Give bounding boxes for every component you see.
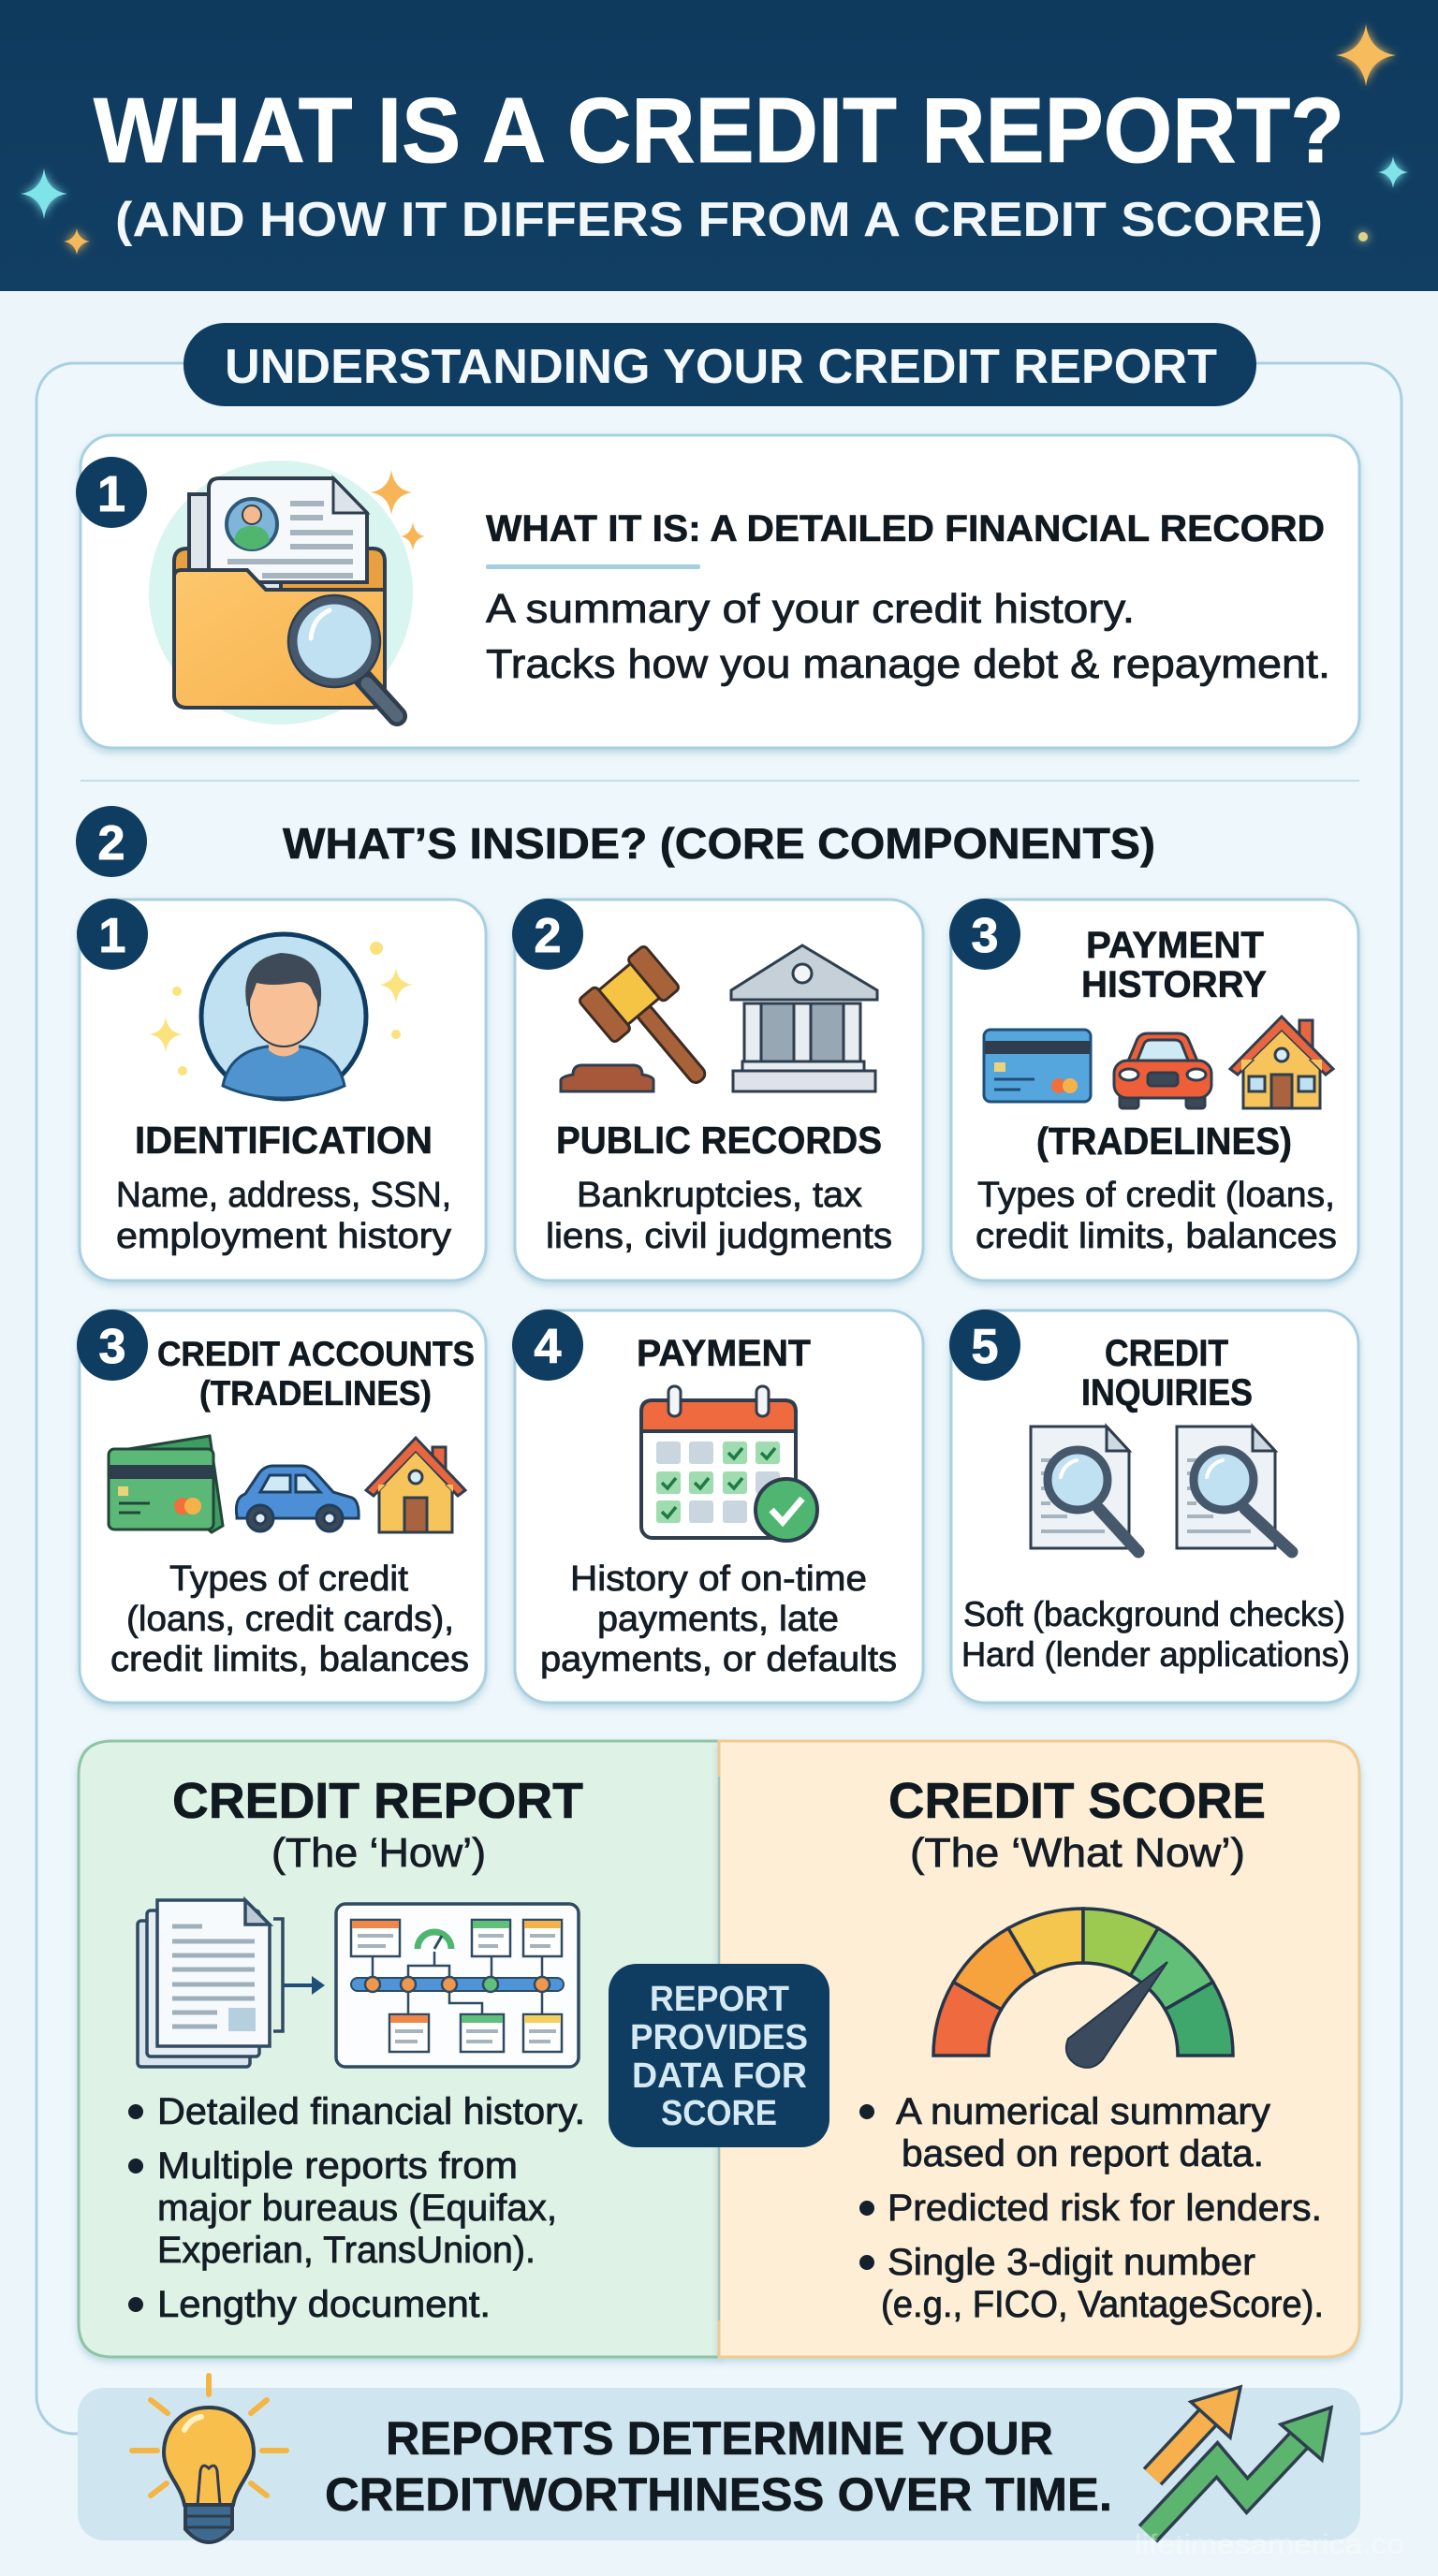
icon: sparkle stars: [21, 24, 1408, 255]
heading: what it is: WHAT IT IS: A DETAILED FINANCIAL RECORD: [486, 508, 1325, 549]
badge 5: [949, 1310, 1020, 1381]
bullet list: credit report: major bureaus (Equifax,: [157, 2188, 557, 2229]
badge 3: [77, 1310, 148, 1381]
icon: blue card: [984, 1030, 1091, 1102]
text: takeaway: [325, 2412, 1112, 2521]
callout: report provides data for score: [609, 1964, 829, 2147]
section heading: what's inside: WHAT’S INSIDE? (CORE COMPONENTS): [283, 819, 1155, 868]
card: identification: employment history: [116, 1217, 451, 1256]
icon: green cards: [109, 1436, 223, 1532]
bullet list: credit score: (e.g., FICO, VantageScore).: [881, 2284, 1324, 2325]
card: public records: Bankruptcies, tax: [577, 1176, 862, 1215]
card: credit inquiries: INQUIRIES: [1081, 1372, 1253, 1413]
panel: credit report vs credit score comparison: [79, 1741, 1359, 2357]
icon: document with magnifier: [1177, 1427, 1292, 1552]
right side: credit score: [719, 1741, 1359, 2357]
bullet list: credit report: Detailed financial history.: [157, 2091, 585, 2132]
card: identification: IDENTIFICATION: [135, 1119, 433, 1162]
card: payment: [512, 1310, 923, 1703]
card: payment history: Types of credit (loans,: [977, 1176, 1335, 1215]
card: payment history: (TRADELINES): [1036, 1120, 1292, 1163]
text: takeaway: CREDITWORTHINESS OVER TIME.: [325, 2468, 1112, 2521]
title: WHAT IS A CREDIT REPORT?: [94, 79, 1344, 182]
card: payment: payments, late: [597, 1600, 839, 1639]
badge 1: 1: [99, 909, 125, 963]
card: payment history: credit limits, balances: [976, 1217, 1337, 1256]
card: credit inquiries: [949, 1310, 1358, 1703]
card: credit accounts: Types of credit: [169, 1559, 408, 1599]
sparkles: [149, 942, 413, 1076]
icon: orange car: [1114, 1033, 1211, 1108]
card: credit inquiries: Soft (background checks): [963, 1595, 1345, 1633]
badge 5: 5: [972, 1320, 998, 1374]
card: public records: PUBLIC RECORDS: [556, 1119, 882, 1162]
arrow: documents to dashboard: [284, 1976, 325, 1995]
card: credit inquiries: CREDIT: [1105, 1333, 1228, 1374]
icon: courthouse: [731, 945, 877, 1091]
section pill: understanding your credit report: UNDERSTANDING YOUR CREDIT REPORT: [225, 340, 1217, 394]
card: credit accounts: CREDIT ACCOUNTS: [157, 1335, 475, 1373]
card: payment history: HISTORRY: [1081, 964, 1267, 1005]
card: public records: [512, 899, 923, 1281]
badge 2: [512, 899, 583, 970]
text: description: [486, 586, 1330, 687]
card: payment: payments, or defaults: [540, 1640, 897, 1679]
header banner: [0, 0, 1438, 291]
callout: report provides data for score: REPORT: [650, 1980, 789, 2019]
icon: gauge: [933, 1909, 1233, 2068]
watermark: lifetimesamerica.co: [1135, 2529, 1404, 2560]
badge 3: 3: [972, 909, 998, 963]
card: payment: History of on-time: [570, 1559, 867, 1599]
card: identification: [77, 899, 486, 1281]
icon: blue car: [236, 1466, 359, 1531]
text: takeaway: REPORTS DETERMINE YOUR: [386, 2412, 1053, 2465]
icon: gavel: [561, 944, 734, 1107]
icon: document with magnifier: [1031, 1427, 1138, 1552]
card: credit accounts: (TRADELINES): [199, 1374, 432, 1412]
text: description: A summary of your credit history.: [486, 586, 1135, 632]
icon: house: [366, 1438, 465, 1532]
card: payment: PAYMENT: [637, 1333, 811, 1374]
badge 2: 2: [535, 909, 561, 963]
gauge needle: [1066, 1962, 1167, 2068]
right side: credit score: CREDIT SCORE: [888, 1773, 1266, 1829]
banner: key takeaway: [78, 2376, 1360, 2542]
bullet list: credit score: based on report data.: [902, 2133, 1264, 2174]
badge 1: [77, 899, 148, 970]
bullet list: credit report: Multiple reports from: [157, 2145, 518, 2187]
icon: calendar: [641, 1386, 817, 1541]
section heading: what's inside: [76, 806, 1155, 877]
callout: report provides data for score: DATA FOR: [632, 2056, 807, 2096]
icon: light bulb: [132, 2376, 286, 2542]
bullet list: credit report: Lengthy document.: [157, 2284, 491, 2325]
badge 1: [76, 457, 147, 528]
badge 3: 3: [99, 1320, 125, 1374]
card: credit accounts: [77, 1310, 486, 1703]
panel: what it is: [76, 435, 1359, 748]
bullet list: credit score: Predicted risk for lenders.: [888, 2188, 1322, 2229]
card: identification: Name, address, SSN,: [116, 1176, 451, 1215]
callout: report provides data for score: SCORE: [661, 2094, 777, 2133]
right side: credit score: (The ‘What Now’): [910, 1830, 1245, 1876]
badge 1: 1: [97, 466, 125, 522]
bullet list: credit report: [128, 2091, 585, 2325]
icon: dashboard timeline: [336, 1904, 579, 2067]
left side: credit report: [79, 1741, 719, 2357]
badge 4: [512, 1310, 583, 1381]
callout: report provides data for score: PROVIDES: [630, 2018, 808, 2057]
card: credit inquiries: Hard (lender applications): [961, 1635, 1350, 1674]
card: credit accounts: credit limits, balances: [110, 1640, 469, 1679]
bullet list: credit score: Single 3-digit number: [888, 2242, 1255, 2283]
icon: growth arrows: [1148, 2387, 1331, 2534]
card: payment history: [949, 899, 1358, 1281]
left side: credit report: (The ‘How’): [271, 1830, 486, 1876]
bullet list: credit report: Experian, TransUnion).: [157, 2230, 536, 2271]
card: public records: liens, civil judgments: [546, 1217, 892, 1256]
card: payment history: PAYMENT: [1086, 925, 1264, 966]
bullet list: credit score: [859, 2091, 1324, 2325]
badge 3: [949, 899, 1020, 970]
outer panel outline: [37, 363, 1401, 2434]
card: credit accounts: (loans, credit cards),: [126, 1600, 454, 1639]
badge 4: 4: [535, 1320, 562, 1374]
subtitle: (AND HOW IT DIFFERS FROM A CREDIT SCORE): [115, 193, 1323, 247]
icon: folder with magnifier: [149, 461, 425, 724]
bullet list: credit score: A numerical summary: [896, 2091, 1270, 2132]
icon: person: [149, 934, 413, 1099]
left side: credit report: CREDIT REPORT: [172, 1773, 583, 1829]
icon: document stack: [138, 1900, 283, 2067]
icon: house: [1230, 1017, 1333, 1108]
section pill: understanding your credit report: [183, 323, 1256, 406]
section heading: what's inside: 2: [98, 816, 125, 871]
text: description: Tracks how you manage debt & repayment.: [486, 641, 1330, 687]
